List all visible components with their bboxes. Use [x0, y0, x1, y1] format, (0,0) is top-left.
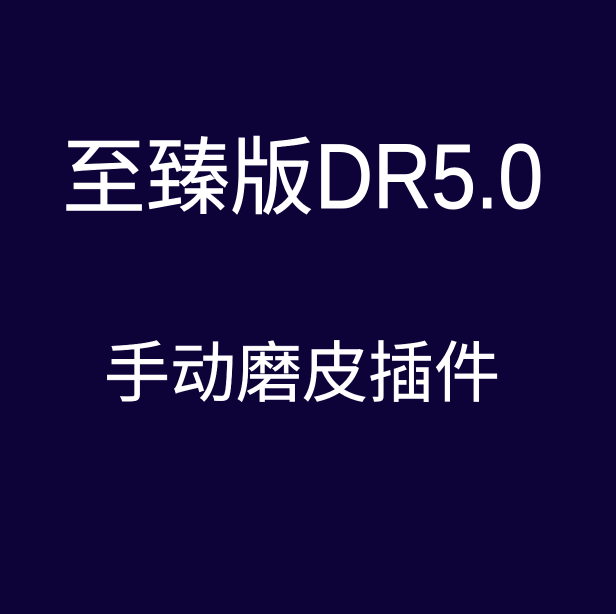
- title: [62, 126, 543, 228]
- title: 至臻版: [62, 131, 314, 225]
- subtitle: 手动磨皮插件: [104, 336, 500, 410]
- title: DR5.0: [315, 126, 543, 228]
